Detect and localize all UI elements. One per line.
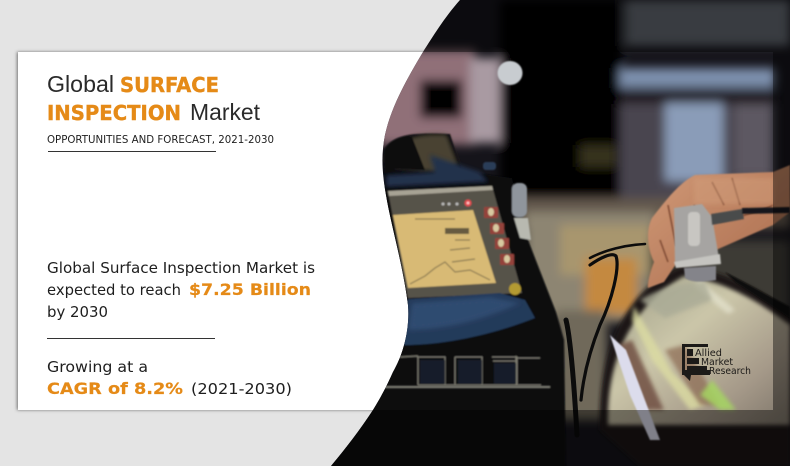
title xyxy=(47,71,261,125)
stitched base frame xyxy=(400,356,541,385)
bokeh light xyxy=(498,61,522,85)
device knobs xyxy=(512,183,527,217)
market size statement: by 2030 xyxy=(47,303,108,321)
ultrasonic probe xyxy=(674,204,790,282)
black cables xyxy=(566,244,645,435)
panel: white text card xyxy=(18,52,518,410)
subtitle rule xyxy=(48,151,216,152)
photo background: blurred workshop xyxy=(375,0,790,420)
device buttons xyxy=(484,207,514,265)
photo: ultrasonic inspection of a metal cylinder xyxy=(320,0,790,466)
cylinder under inspection xyxy=(597,267,790,441)
title: INSPECTION xyxy=(47,101,181,125)
device: leather case and screen xyxy=(330,133,566,466)
growth rate statement xyxy=(47,358,292,398)
title: Global xyxy=(47,71,114,97)
title: SURFACE xyxy=(120,73,219,97)
logo: Allied Market Research: Research xyxy=(709,366,751,377)
darkened border outside the card area xyxy=(320,0,790,466)
subtitle: OPPORTUNITIES AND FORECAST, 2021-2030 xyxy=(47,134,274,146)
logo: Allied Market Research: Allied xyxy=(695,348,722,359)
lower leather xyxy=(404,293,535,345)
market size statement: Global Surface Inspection Market is xyxy=(47,259,315,277)
market size statement: $7.25 Billion xyxy=(189,280,311,299)
section rule xyxy=(47,338,215,339)
market size statement: expected to reach xyxy=(47,281,181,299)
market size statement xyxy=(47,259,315,321)
title: Market xyxy=(190,99,261,125)
logo: Allied Market Research: Market xyxy=(701,357,733,368)
hand holding the probe xyxy=(648,165,790,288)
device indicator lights xyxy=(464,200,472,206)
growth rate statement: Growing at a xyxy=(47,358,148,376)
growth rate statement: (2021-2030) xyxy=(191,380,292,398)
logo: Allied Market Research xyxy=(682,344,751,381)
device screen xyxy=(393,210,496,288)
growth rate statement: CAGR of 8.2% xyxy=(47,379,183,398)
